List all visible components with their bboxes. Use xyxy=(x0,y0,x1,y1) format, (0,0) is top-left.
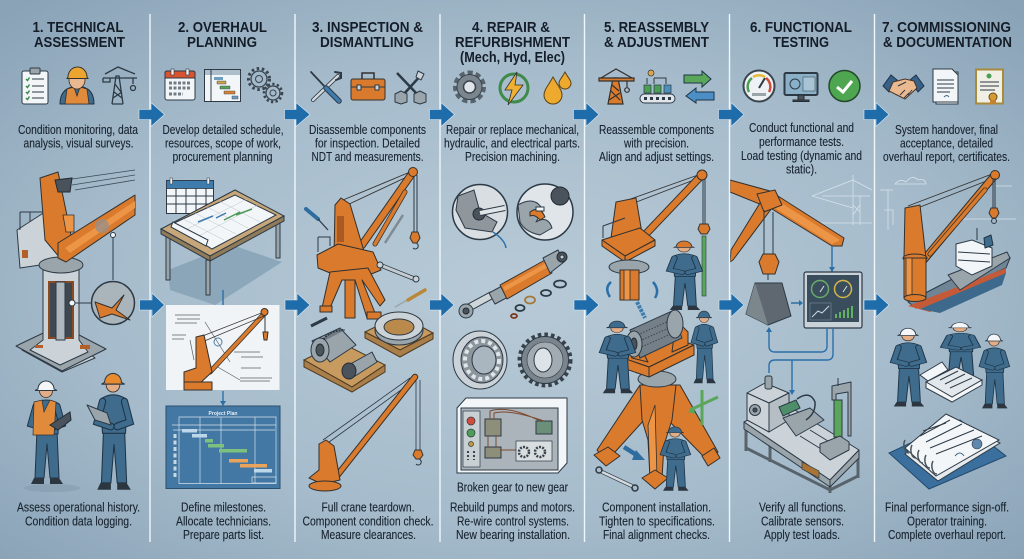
text: step 6 description: Conduct functional and xyxy=(749,121,854,135)
illustration: hydraulic cylinder xyxy=(459,250,567,318)
text: step 3 activities: Full crane teardown. xyxy=(322,500,414,514)
icon: tower crane xyxy=(599,69,634,104)
panel: step 1 technical assessment xyxy=(16,19,140,528)
text: step 4 activities: Re-wire control systems. xyxy=(457,514,569,528)
heading: step 6 xyxy=(750,19,852,51)
text: step 6 activities xyxy=(759,500,846,542)
icon: calendar xyxy=(165,69,195,100)
panel: step 5 reassembly and adjustment xyxy=(594,19,720,542)
heading: step 5: & ADJUSTMENT xyxy=(604,34,709,51)
text: step 3 description xyxy=(309,123,426,164)
illustration: ball bearing xyxy=(453,331,507,389)
panel: step 3 inspection and dismantling xyxy=(302,19,434,542)
text: step 6 description: static). xyxy=(786,162,817,176)
text: step 2 activities: Allocate technicians. xyxy=(176,514,271,528)
illustration: crane being dismantled xyxy=(317,168,420,319)
column dividers xyxy=(150,14,874,542)
heading: step 4: 4. REPAIR & xyxy=(472,19,550,36)
text: step 4 description: Precision machining. xyxy=(465,150,560,164)
panel: step 4 repair and refurbishment xyxy=(444,19,580,542)
text: step 6 activities: Apply test loads. xyxy=(764,528,840,542)
panel: step 2 overhaul planning xyxy=(161,19,284,542)
callout: worn bushing detail xyxy=(452,184,508,248)
heading: step 4: (Mech, Hyd, Elec) xyxy=(460,49,565,66)
heading: step 3 xyxy=(312,19,423,51)
text: step 5 description xyxy=(599,123,714,164)
heading: step 7 xyxy=(882,19,1012,51)
text: step 2 activities: Define milestones. xyxy=(181,500,266,514)
illustration: crane boom with test weight xyxy=(730,180,844,325)
icon: crossed tools and parts xyxy=(395,71,426,104)
text: step 5 description: with precision. xyxy=(623,136,689,150)
text: step 4 activities: Rebuild pumps and motors. xyxy=(450,500,575,514)
illustration: loose tools xyxy=(306,209,425,326)
illustration: winch and gearbox on pallet xyxy=(304,328,385,392)
icon: worker xyxy=(60,67,94,104)
heading: step 2: PLANNING xyxy=(187,34,257,51)
figure: technician aligning beam xyxy=(670,236,706,310)
text: step 1 description: analysis, visual surveys. xyxy=(24,136,134,150)
text: step 3 description: Disassemble components xyxy=(309,123,426,137)
caption: broken gear to new gear: Broken gear to new gear xyxy=(457,480,568,494)
text: step 6 activities: Verify all functions. xyxy=(759,500,846,514)
text: step 2 description: Develop detailed schedule, xyxy=(162,123,284,137)
icon: oil drops xyxy=(544,72,571,104)
heading: step 3: DISMANTLING xyxy=(320,34,414,51)
illustration: assembled crane xyxy=(309,377,423,491)
arrows: sensor feedback lines xyxy=(766,300,833,395)
icon: gears xyxy=(248,68,282,102)
icon: monitor xyxy=(784,73,818,102)
text: step 3 activities: Component condition check. xyxy=(302,514,434,528)
icon: gear xyxy=(456,73,484,101)
heading: step 6: 6. FUNCTIONAL xyxy=(750,19,852,36)
text: step 3 activities xyxy=(302,500,434,542)
text: step 2 activities xyxy=(176,500,271,542)
panel: step 6 functional testing xyxy=(730,19,872,542)
heading: step 1: ASSESSMENT xyxy=(34,34,125,51)
text: step 4 activities: New bearing installation. xyxy=(456,528,570,542)
callout: new bearing detail xyxy=(517,184,573,240)
text: step 7 activities xyxy=(885,500,1009,542)
illustration: crane being reassembled xyxy=(602,170,710,300)
chart: project plan gantt xyxy=(166,406,280,488)
text: step 2 description xyxy=(162,123,284,164)
panel: step 7 commissioning and documentation xyxy=(880,19,1016,542)
heading: step 3: 3. INSPECTION & xyxy=(312,19,423,36)
text: step 2 description: resources, scope of work, xyxy=(165,136,281,150)
heading: step 2 xyxy=(178,19,267,51)
illustration: monitoring tablet with gauges xyxy=(804,246,862,328)
text: step 5 activities: Final alignment checks. xyxy=(603,528,710,542)
text: step 5 activities: Component installation. xyxy=(602,500,711,514)
text: step 5 description: Align and adjust settings. xyxy=(599,150,714,164)
text: step 4 description: hydraulic, and electrical parts. xyxy=(444,136,580,150)
text: step 3 activities: Measure clearances. xyxy=(321,528,416,542)
text: step 7 description xyxy=(883,123,1010,164)
icon: gauge xyxy=(744,70,774,102)
illustration: crane with cargo ship xyxy=(903,170,1010,313)
icon: gantt chart xyxy=(204,70,240,102)
text: step 4 activities xyxy=(450,500,575,542)
icon: handshake xyxy=(883,75,924,99)
figures: two inspectors xyxy=(24,373,131,492)
text: step 3 description: NDT and measurements. xyxy=(312,150,424,164)
illustration: worn crane pedestal xyxy=(16,170,135,372)
icon: lightning ring xyxy=(500,72,528,105)
arrow: schematic to project plan xyxy=(220,391,226,406)
arrows: upper row between steps xyxy=(139,102,889,126)
figures: team signing documents xyxy=(894,323,1008,408)
text: step 3 description: for inspection. Detailed xyxy=(315,136,420,150)
heading: step 4 xyxy=(455,19,570,66)
icon: wrench and screwdriver xyxy=(311,72,341,101)
illustration: hydraulic test bench xyxy=(744,376,859,493)
text: step 2 description: procurement planning xyxy=(172,150,273,164)
heading: step 1: 1. TECHNICAL xyxy=(32,19,124,36)
text: step 6 description: Load testing (dynamic and xyxy=(741,149,862,163)
icon: conveyor assembly xyxy=(640,70,675,103)
illustration: calendar on wall xyxy=(166,178,214,214)
text: step 1 activities: Assess operational history. xyxy=(17,500,140,514)
text: step 4 description: Repair or replace mechanical, xyxy=(446,123,579,137)
illustration: crane schematic sheet xyxy=(166,290,280,390)
heading: step 6: TESTING xyxy=(773,34,829,51)
figure: three technicians xyxy=(603,311,716,491)
heading: step 5 xyxy=(604,19,709,51)
heading: step 4: REFURBISHMENT xyxy=(455,34,570,51)
heading: step 2: 2. OVERHAUL xyxy=(178,19,267,36)
text: step 6 activities: Calibrate sensors. xyxy=(761,514,844,528)
illustration: port line art xyxy=(812,175,872,225)
illustration: port line art xyxy=(880,177,1016,230)
illustration: signed documents xyxy=(920,362,982,402)
icon: certificate xyxy=(976,70,1003,105)
icon: two-way arrows xyxy=(684,71,714,103)
icon: toolbox xyxy=(351,73,385,100)
illustration: spur gear xyxy=(520,335,570,385)
text: step 4 description xyxy=(444,123,580,164)
text: step 5 description: Reassemble components xyxy=(599,123,714,137)
text: step 1 activities: Condition data logging. xyxy=(25,514,132,528)
text: step 7 activities: Operator training. xyxy=(907,514,987,528)
text: step 1 activities xyxy=(17,500,140,528)
text: step 1 description xyxy=(18,123,138,150)
illustration: slew bearing on pallet xyxy=(365,312,433,357)
text: step 5 activities xyxy=(599,500,715,542)
text: step 7 description: acceptance, detailed xyxy=(900,136,993,150)
text: step 7 description: System handover, final xyxy=(895,123,998,137)
callout: magnified crack xyxy=(69,282,134,324)
illustration: winch on tripod stand xyxy=(594,302,720,489)
heading: step 1 xyxy=(32,19,125,51)
illustration: planning table with blueprint xyxy=(161,190,284,305)
heading: step 7: 7. COMMISSIONING xyxy=(882,19,1011,36)
text: step 5 activities: Tighten to specifications. xyxy=(599,514,715,528)
chart: project plan gantt: Project Plan xyxy=(209,411,237,417)
illustration: wrench and guides xyxy=(596,390,718,491)
icon: tower crane xyxy=(103,67,137,104)
illustration: electrical control panel xyxy=(457,398,567,473)
text: step 2 activities: Prepare parts list. xyxy=(183,528,264,542)
icon: document xyxy=(933,69,958,104)
arrows: lower row between steps xyxy=(140,293,889,317)
icon: check mark xyxy=(829,70,860,102)
text: step 1 description: Condition monitoring, data xyxy=(18,123,138,137)
text: step 6 description xyxy=(741,121,862,176)
illustration: overhaul report binder xyxy=(889,414,1006,489)
text: step 6 description: performance tests. xyxy=(759,135,844,149)
heading: step 5: 5. REASSEMBLY xyxy=(604,19,709,36)
illustration: seal rings xyxy=(511,280,566,318)
icon: clipboard xyxy=(22,68,48,104)
